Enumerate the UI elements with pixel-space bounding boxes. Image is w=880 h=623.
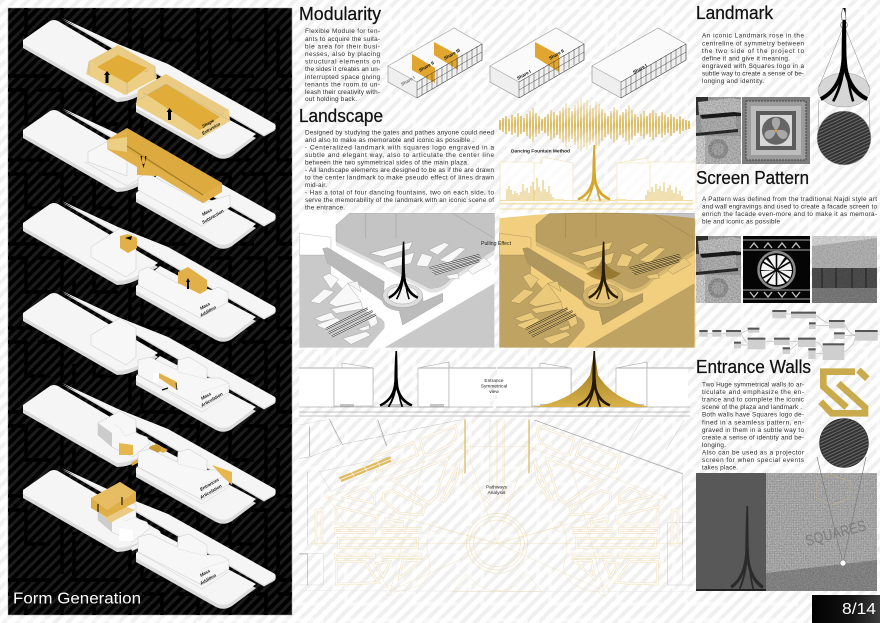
text: landscape description: subtle and elegant way, also to articulate the center line xyxy=(305,152,494,159)
diagram: module with two shares xyxy=(490,28,584,98)
text: landscape description: - Centeralized landmark with squares logo engraved in a xyxy=(305,144,494,151)
diagram: module with one share xyxy=(592,28,686,98)
diagram: entrances articulation xyxy=(23,383,276,524)
text: modularity description: structural elements on xyxy=(305,59,380,66)
text: landscape description: and also to make as memorable and iconic as possible . xyxy=(305,137,474,144)
diagram: module with two shares: Share I xyxy=(516,69,532,81)
text: modularity description: out holding back. xyxy=(305,96,357,103)
text: modularity description: interrupted space giving xyxy=(305,74,380,81)
diagram: landmark tower with pattern detail xyxy=(817,8,871,165)
render: facade screen xyxy=(812,236,877,303)
text: modularity description: Flexible Module for ten- xyxy=(305,28,380,35)
diagram: mass articulation xyxy=(23,291,276,432)
text: screen pattern description: ble and iconic as possible xyxy=(702,219,780,226)
photo: stone engraving xyxy=(696,97,741,164)
render: plaza pulling effect gold model xyxy=(499,212,695,348)
render: plaza grey model xyxy=(299,213,494,348)
text: landscape description: serve the memorability of the landmark with an iconic scene of xyxy=(305,197,494,204)
label: form generation: Form Generation xyxy=(13,590,141,608)
text: entrance walls description: Both walls have Squares logo de- xyxy=(702,412,804,419)
text: modularity description: the sides it creates an un- xyxy=(305,66,380,73)
diagram: mass articulation: Articulation xyxy=(199,391,224,408)
page number xyxy=(812,595,880,623)
diagram: final mass addition: Mass xyxy=(199,568,211,578)
text: modularity description: ble area for their busi- xyxy=(305,43,380,50)
label: pulling effect: Pulling Effect xyxy=(481,241,512,247)
diagram: module with three shares: Share I xyxy=(400,75,416,87)
diagram: final mass addition xyxy=(23,468,276,609)
photo: entrance wall render: SQUARES xyxy=(804,517,868,550)
text: landscape description: - Has a total of four dancing fountains, two on each side, to xyxy=(305,189,494,196)
image: screen pattern motif xyxy=(743,236,810,303)
diagram: entrance symmetrical view xyxy=(299,351,694,416)
diagram: module with three shares: Share III xyxy=(443,48,461,61)
text: entrance walls description: scene of the plaza and landmark . xyxy=(702,404,802,411)
photo: stone engraving detail xyxy=(696,236,741,303)
plan: pathways analysis xyxy=(299,418,693,596)
diagram: mass addition xyxy=(23,201,276,342)
diagram: dancing fountain elevation xyxy=(500,145,696,209)
text: modularity description: ants to acquire the suita- xyxy=(305,36,380,43)
diagram: module with three shares xyxy=(388,28,482,98)
text: landscape description: to the center landmark to make pseudo effect of lines drawn xyxy=(305,174,494,181)
text: landmark description: the two side of the project to xyxy=(702,48,804,55)
label: pathways analysis: Analysis xyxy=(488,490,506,496)
text: landmark description: subtle way to create a sense of be- xyxy=(702,70,804,77)
heading: entrance walls: Entrance Walls xyxy=(696,357,811,377)
text: landmark description: An iconic Landmark rose in the xyxy=(702,33,804,40)
heading: landmark: Landmark xyxy=(696,3,774,23)
image: wall pattern detail circle xyxy=(820,418,868,468)
diagram: mass subtraction: Subtraction xyxy=(201,208,225,225)
text: landmark description: engraved with Squares logo in a xyxy=(702,63,804,70)
text: screen pattern description: A Pattern was defined from the traditional Najdi style art xyxy=(702,196,877,203)
diagram: mass addition: Addition xyxy=(198,304,217,318)
diagram: entrances articulation: Entrances xyxy=(199,477,220,492)
chart: gold sound waveform xyxy=(500,98,689,152)
text: landscape description: the entrance. xyxy=(305,204,345,211)
label: pathways analysis: Pathways xyxy=(486,484,507,490)
text: entrance walls description: trance and to complete the iconic xyxy=(702,396,805,403)
diagram: mass articulation: Mass xyxy=(200,391,212,401)
diagram: mass addition: Mass xyxy=(199,301,211,311)
photo: entrance wall render xyxy=(696,457,877,591)
diagram: mass subtraction: Mass xyxy=(201,207,213,217)
text: landscape description: - All landscape elements are designed to be as if the are drawn xyxy=(305,167,494,174)
heading: landscape: Landscape xyxy=(299,106,383,126)
diagram: final mass addition: Addition xyxy=(198,572,217,586)
icon: squares logo xyxy=(821,370,867,413)
diagram: module with two shares: Share II xyxy=(548,48,565,61)
text: landscape description: Designed by studying the gates and pathes anyone could need xyxy=(305,129,494,136)
heading: screen pattern: Screen Pattern xyxy=(696,168,809,188)
text: landmark description: longing and identity. xyxy=(702,78,764,85)
label: dancing fountain method: Dancing Fountain Method xyxy=(511,148,570,154)
text: entrance walls description: screen for when special events xyxy=(702,457,804,464)
diagram: mass subtraction xyxy=(23,108,276,249)
text: screen pattern description: and wall engravings and used to create a facade screen to xyxy=(702,204,877,211)
text: modularity description: nesses, also by placing xyxy=(305,51,380,58)
text: landscape description: mid-air. xyxy=(305,182,327,189)
diagram: shape extrusion: Shape xyxy=(201,118,215,129)
page number: 8/14 xyxy=(842,601,876,618)
diagram: parametric node graph xyxy=(699,310,878,360)
text: entrance walls description: takes place. xyxy=(702,464,738,471)
text: entrance walls description: create a sense of identity and be- xyxy=(702,434,804,441)
text: landscape description: between the two symmetrical sides of the main plaza. xyxy=(305,159,469,166)
text: entrance walls description: fined in a seamless pattern, en- xyxy=(702,419,804,426)
text: modularity description: tenants the room to un- xyxy=(305,81,380,88)
diagram: module with three shares: Share II xyxy=(418,60,435,73)
diagram: module with one share: Share I xyxy=(632,63,648,75)
text: modularity description: leash their creativity with- xyxy=(305,89,380,96)
panel: form generation xyxy=(8,8,292,615)
text: landmark description: centreline of symmetry between xyxy=(702,40,804,47)
diagram: shape extrusion xyxy=(23,18,276,159)
text: entrance walls description: graved in them in a subtle way to xyxy=(702,427,804,434)
text: landmark description: define it and give it meaning. xyxy=(702,56,790,63)
text: entrance walls description: longing. xyxy=(702,442,726,449)
label: entrance symmetrical view: Entrance xyxy=(484,378,504,384)
heading: modularity: Modularity xyxy=(299,4,381,24)
image: najdi ornament square xyxy=(742,97,810,164)
text: screen pattern description: enrich the facade even-more and to make it as memora- xyxy=(702,211,877,218)
text: entrance walls description: Two Huge symmetrical walls to ar- xyxy=(702,381,804,388)
label: entrance symmetrical view: Symmetrical xyxy=(481,384,507,390)
diagram: entrances articulation: Articulation xyxy=(198,483,223,500)
text: entrance walls description: Also can be used as a projector xyxy=(702,449,805,456)
text: entrance walls description: ticulate and emphasize the en- xyxy=(702,389,804,396)
diagram: shape extrusion: Extrusion xyxy=(201,121,221,136)
label: entrance symmetrical view: view xyxy=(489,389,499,395)
